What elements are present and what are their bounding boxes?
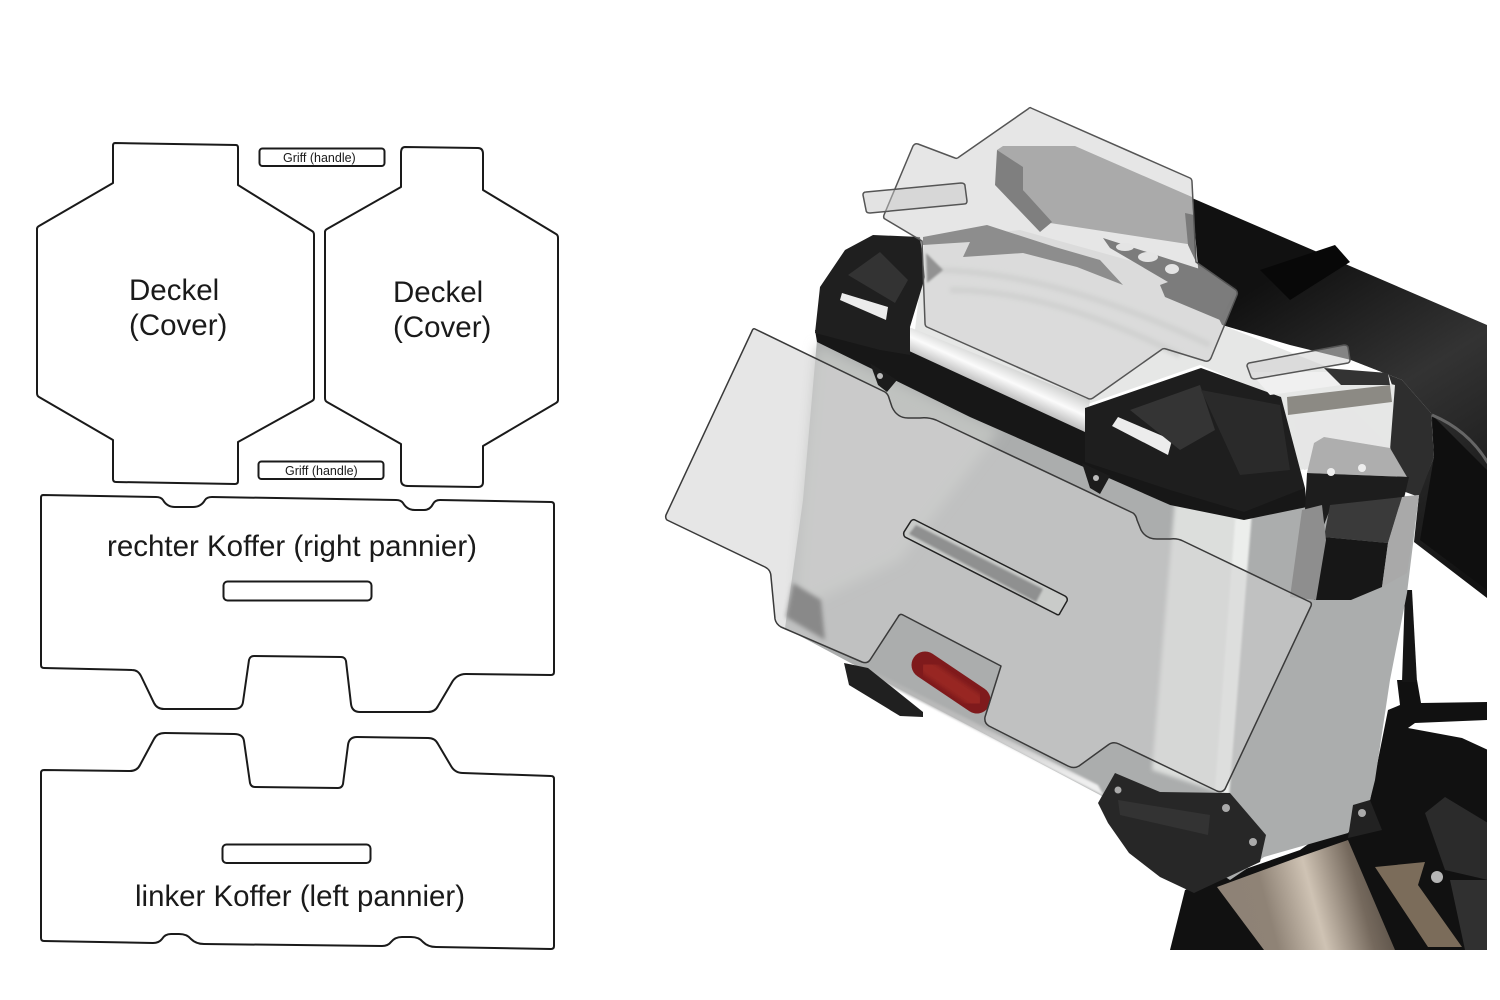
overlay: handle film left: [863, 183, 967, 213]
overlay: handle film right: [1247, 345, 1350, 379]
rear wheel, frame and tube: [1170, 590, 1488, 950]
overlay: cover film: [884, 108, 1237, 399]
dark strip by rail: [1324, 368, 1390, 385]
template: left pannier slot: [222, 844, 370, 863]
lid plate streaks: [930, 270, 1210, 355]
overlay: pannier film: [666, 329, 1311, 792]
label: bottom handle: Griff (handle): [285, 464, 358, 478]
rear rail: [1287, 385, 1392, 415]
latch: [1290, 437, 1419, 600]
exhaust bracket: [1375, 862, 1462, 947]
exhaust pipe: [1217, 840, 1395, 950]
lid bright bar: [907, 327, 1090, 438]
plate under rail: [1304, 468, 1308, 470]
template: top handle: [260, 148, 384, 166]
panel: cut-out templates: [37, 143, 558, 949]
upper white plate: [1250, 372, 1341, 395]
label: left cover translation: (Cover): [129, 309, 227, 342]
top handle under film: [923, 225, 1123, 285]
template: left pannier: [41, 733, 554, 949]
template: right pannier slot: [224, 582, 372, 600]
right lower guard: [1348, 800, 1382, 838]
back-left corner foot: [844, 663, 923, 717]
template: bottom handle: [258, 462, 384, 479]
lower body edge: [883, 680, 1104, 796]
label: right cover translation: (Cover): [393, 311, 491, 344]
left corner under film ghost: [926, 253, 943, 283]
template: left cover: [37, 143, 314, 484]
label: right pannier: rechter Koffer (right pannier): [107, 530, 477, 563]
red reflector: [925, 665, 977, 700]
pannier body: [785, 340, 1419, 880]
label: left cover: Deckel: [129, 274, 219, 307]
label: right cover: Deckel: [393, 276, 483, 309]
label: left pannier: linker Koffer (left pannier): [135, 880, 465, 913]
buttons under film: [1103, 238, 1220, 320]
label: top handle: Griff (handle): [283, 151, 356, 165]
photo: motorcycle pannier: [785, 146, 1488, 950]
lid top plate: [915, 230, 1395, 470]
template: right cover: [325, 147, 558, 487]
template: right pannier: [41, 495, 554, 712]
lid mounts: [870, 363, 1110, 494]
motorcycle rear: dark background: [1192, 198, 1488, 598]
lower-left mount: [786, 583, 825, 640]
lid corner: left: [815, 235, 925, 355]
overlay: pannier film slot: [904, 520, 1067, 615]
lid band: [815, 330, 1307, 520]
bottom corner guard: [1098, 773, 1266, 893]
lid corner: right: [1085, 368, 1305, 488]
bike tail under film: [995, 146, 1196, 262]
body left face shading: [795, 345, 1252, 795]
